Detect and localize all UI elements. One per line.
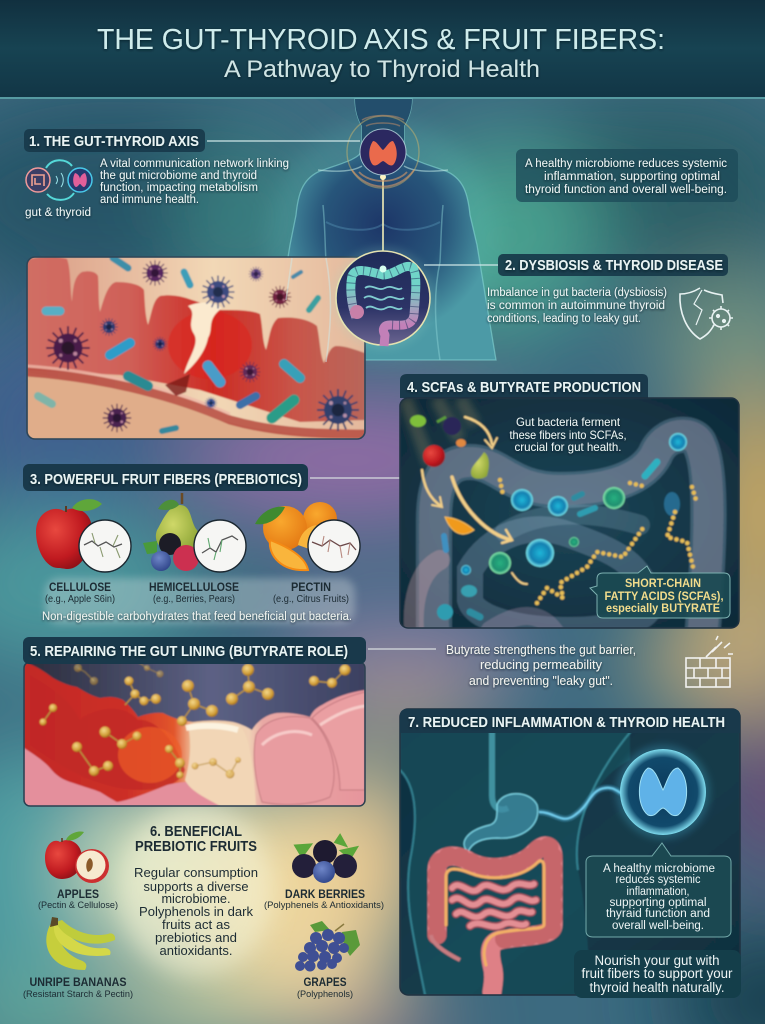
icon: grapes xyxy=(295,921,360,972)
callout: healthy microbiome: thyroid function and overall well-being. xyxy=(525,184,727,196)
label: grapes xyxy=(297,975,353,1000)
text block: dysbiosis description: Imbalance in gut bacteria (dysbiosis) xyxy=(487,287,667,299)
lower pink fold xyxy=(24,748,219,806)
torso outline xyxy=(400,725,630,995)
icon: thyroid in neck xyxy=(347,116,419,188)
text block: gut bacteria ferment: Gut bacteria ferment xyxy=(516,415,621,429)
label: grapes: (Polyphenols) xyxy=(297,989,353,1000)
heading: beneficial prebiotic fruits xyxy=(135,824,257,855)
callout: healthy microbiome: inflammation, supporting optimal xyxy=(544,171,720,183)
title: THE GUT-THYROID AXIS & FRUIT FIBERS: xyxy=(97,24,665,56)
cream healing zone xyxy=(185,722,256,806)
soft glow behind fiber labels xyxy=(45,578,355,624)
panel: dysbiosis leaky gut illustration xyxy=(27,257,365,439)
title xyxy=(97,24,665,83)
panel: repairing the gut lining illustration xyxy=(24,662,365,806)
label: section 4 heading xyxy=(400,374,648,398)
header band xyxy=(0,0,765,99)
panel: SCFA production illustration xyxy=(400,398,739,640)
nerve signal line xyxy=(539,788,628,819)
callout: short-chain fatty acids xyxy=(590,566,730,618)
heading: beneficial prebiotic fruits: 6. BENEFICIAL xyxy=(150,824,242,840)
text block: butyrate strengthens barrier: Butyrate strengthens the gut barrier, xyxy=(446,643,636,657)
label: section 1 heading: 1. THE GUT-THYROID AXIS xyxy=(29,133,199,150)
label: pectin: (e.g., Citrus Fruits) xyxy=(273,594,349,605)
callout: healthy microbiome reduces inflammation: inflammation, xyxy=(626,886,690,898)
label: cellulose: (e.g., Apple S6in) xyxy=(45,594,115,605)
callout: healthy microbiome reduces inflammation: thyraid function and xyxy=(606,908,710,920)
right pink lobes xyxy=(254,717,334,805)
icon: dark berries xyxy=(292,836,357,883)
label: section 3 heading xyxy=(23,464,400,491)
callout: healthy microbiome reduces inflammation: supporting optimal xyxy=(610,897,706,909)
text block: axis description: the gut microbiome and thyroid xyxy=(100,170,257,182)
text block: regular consumption: microbiome. xyxy=(162,892,230,906)
text block: axis description xyxy=(100,158,289,206)
label: section 4 heading: 4. SCFAs & BUTYRATE PRODUCTION xyxy=(407,379,641,396)
label: cellulose xyxy=(45,580,115,605)
text block: dysbiosis description xyxy=(487,287,667,325)
label: apples xyxy=(38,887,118,911)
label: section 5 heading: 5. REPAIRING THE GUT LINING (BUTYRATE ROLE) xyxy=(30,643,348,660)
icon caption: gut & thyroid xyxy=(25,207,91,219)
closing message: nourish your gut: Nourish your gut with xyxy=(594,953,720,968)
icon: apples xyxy=(45,831,109,883)
text block: dysbiosis description: is common in autoimmune thyroid xyxy=(487,300,665,312)
tissue with villi xyxy=(27,257,365,422)
callout: short-chain fatty acids: especially BUTYRATE xyxy=(606,603,720,615)
label: section 2 heading: 2. DYSBIOSIS & THYROID DISEASE xyxy=(505,257,723,274)
label: section 2 heading xyxy=(424,254,728,276)
label: unripe bananas xyxy=(23,975,133,1000)
golden arrows xyxy=(422,417,527,584)
text block: gut bacteria ferment: crucial for gut health. xyxy=(514,440,622,454)
label: grapes: GRAPES xyxy=(304,975,346,989)
icon: cracked shield with microbe xyxy=(680,288,733,339)
label: apples: (Pectin & Cellulose) xyxy=(38,900,118,911)
caption: non-digestible carbohydrates: Non-digestible carbohydrates that feed beneficial gut bacteria. xyxy=(42,611,352,623)
heading: beneficial prebiotic fruits: PREBIOTIC FRUITS xyxy=(135,839,257,855)
text block: regular consumption: fruits act as xyxy=(162,918,230,932)
label: hemicellulose: HEMICELLULOSE xyxy=(149,580,239,594)
text block: gut bacteria ferment xyxy=(510,415,626,454)
callout: healthy microbiome reduces inflammation: overall well-being. xyxy=(612,920,704,932)
closing message: nourish your gut: thyroid health naturally. xyxy=(590,980,724,995)
text block: axis description: function, impacting metabolism xyxy=(100,182,258,194)
icon: gut inside glowing circle xyxy=(331,246,435,350)
label: pectin: PECTIN xyxy=(291,580,331,594)
small intestine xyxy=(452,884,536,927)
falling fruits xyxy=(410,415,489,534)
label: section 5 heading xyxy=(23,637,436,664)
panel border xyxy=(27,257,365,439)
label: hemicellulose: (e.g., Berries, Pears) xyxy=(153,594,235,605)
text block: regular consumption: Regular consumption xyxy=(134,866,258,880)
text block: axis description: A vital communication network linking xyxy=(100,158,289,170)
label: hemicellulose xyxy=(149,580,239,605)
bacteria xyxy=(38,258,318,431)
tissue mass xyxy=(24,662,365,806)
callout: healthy microbiome reduces inflammation xyxy=(586,843,731,937)
text block: regular consumption: Polyphenols in dark xyxy=(139,905,254,919)
text block: butyrate strengthens barrier: reducing permeability xyxy=(480,658,603,672)
text block: regular consumption: antioxidants. xyxy=(160,944,232,958)
icon: brick wall with trowel xyxy=(686,636,733,687)
label: unripe bananas: UNRIPE BANANAS xyxy=(30,975,126,989)
panel border xyxy=(400,709,740,995)
label: section 1 heading xyxy=(24,129,360,152)
closing message: nourish your gut: fruit fibers to support your xyxy=(582,966,733,981)
callout: healthy microbiome: A healthy microbiome reduces systemic xyxy=(525,158,727,170)
label: apples: APPLES xyxy=(57,887,99,901)
text block: regular consumption: prebiotics and xyxy=(155,931,237,945)
text block: regular consumption: supports a diverse xyxy=(144,880,249,894)
viruses xyxy=(46,260,359,432)
icon: unripe bananas xyxy=(46,917,115,970)
closing message: nourish your gut xyxy=(574,950,741,998)
human body silhouette xyxy=(268,99,498,360)
label: unripe bananas: (Resistant Starch & Pectin) xyxy=(23,989,133,1000)
label: dark berries: (Polyphenels & Antioxidants) xyxy=(264,900,384,911)
butyrate chains xyxy=(500,480,697,603)
text block: dysbiosis description: conditions, leading to leaky gut. xyxy=(487,313,641,325)
callout: short-chain fatty acids: FATTY ACIDS (SCFAs), xyxy=(604,591,724,603)
butyrate molecules xyxy=(43,662,345,775)
icon: gut and thyroid exchange xyxy=(26,160,92,200)
text block: gut bacteria ferment: these fibers into SCFAs, xyxy=(510,428,626,442)
label: dark berries: DARK BERRIES xyxy=(285,887,365,901)
label: pectin xyxy=(273,580,349,605)
red inflamed folds xyxy=(121,712,186,790)
label: cellulose: CELLULOSE xyxy=(49,580,111,594)
cells and bacteria xyxy=(437,433,687,620)
label: dark berries xyxy=(264,887,384,911)
large intestine xyxy=(437,846,553,992)
callout: healthy microbiome reduces inflammation: A healthy microbiome xyxy=(603,863,715,875)
text block: regular consumption xyxy=(134,866,258,958)
icon: oranges with pectin molecule xyxy=(255,502,360,572)
lower submucosa xyxy=(28,376,340,438)
panel: reduced inflammation illustration xyxy=(400,725,740,995)
text block: axis description: and immune health. xyxy=(100,194,199,206)
icon: apple with cellulose molecule xyxy=(36,499,131,572)
label: section 7 heading: 7. REDUCED INFLAMMATION & THYROID HEALTH xyxy=(408,714,725,731)
translucent arm overlay on panel xyxy=(286,258,330,362)
translucent colon xyxy=(414,435,708,640)
panel border xyxy=(400,398,739,628)
panel border xyxy=(24,662,365,806)
label: section 7 heading xyxy=(400,709,740,733)
stomach xyxy=(464,794,538,852)
label: section 3 heading: 3. POWERFUL FRUIT FIBERS (PREBIOTICS) xyxy=(30,471,302,488)
title: A Pathway to Thyroid Health xyxy=(224,56,540,83)
text block: butyrate strengthens barrier xyxy=(446,643,636,688)
callout: short-chain fatty acids: SHORT-CHAIN xyxy=(625,578,701,590)
callout: healthy microbiome xyxy=(516,149,738,202)
icon: glowing thyroid circle xyxy=(616,745,710,839)
axis connector line xyxy=(380,174,386,270)
callout: healthy microbiome reduces inflammation: reduces systemic xyxy=(616,874,701,886)
icon: pear and berries with hemicellulose molecule xyxy=(143,493,246,572)
text block: butyrate strengthens barrier: and preventing "leaky gut". xyxy=(469,674,613,688)
